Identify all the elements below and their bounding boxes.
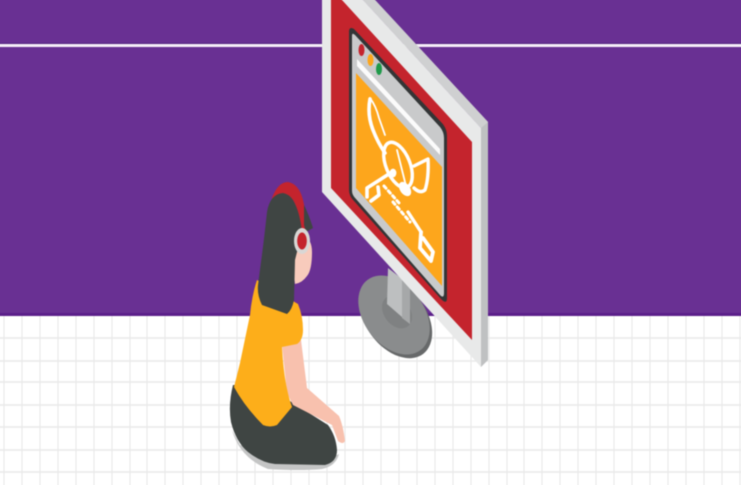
shirt <box>234 280 303 426</box>
monitor side edge <box>352 0 488 367</box>
purple wall <box>0 0 741 316</box>
headband <box>272 182 306 232</box>
monitor stand <box>344 262 447 372</box>
window buttons <box>358 44 382 75</box>
monitor red frame <box>331 0 472 340</box>
window content <box>356 73 442 286</box>
hair <box>258 193 302 314</box>
person <box>230 182 345 470</box>
floor with grid <box>0 314 741 485</box>
monitor outer bezel <box>322 0 481 367</box>
legs <box>230 385 337 465</box>
address bar <box>357 59 440 155</box>
headphone ear cup <box>294 228 310 254</box>
icon: skull and crossed swords <box>367 98 433 261</box>
face <box>290 235 312 284</box>
floor shadow <box>232 430 339 470</box>
monitor <box>322 0 488 367</box>
arm <box>282 340 345 443</box>
monitor screen <box>349 28 447 302</box>
